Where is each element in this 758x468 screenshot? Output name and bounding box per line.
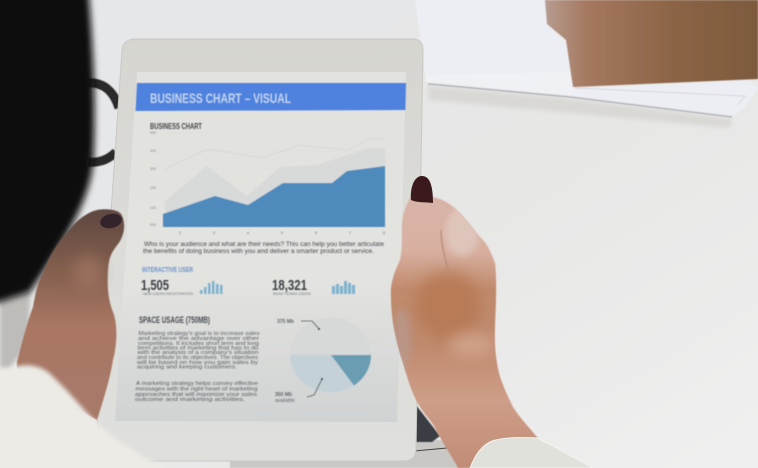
header title: BUSINESS CHART – VISUAL — [150, 90, 291, 106]
pie chart — [290, 318, 371, 393]
marketing paragraph 1: term activities of marketing that has to do — [138, 346, 259, 352]
hair — [0, 0, 94, 315]
x axis labels — [179, 231, 385, 235]
fingernail — [99, 212, 123, 230]
left sleeve — [0, 365, 172, 468]
thumb crease — [441, 230, 450, 274]
mini bars 2 — [332, 281, 355, 294]
screen — [115, 72, 406, 422]
stat: 1,505: NEW USERS REGISTRATION — [143, 292, 193, 296]
intro paragraph: the benefits of doing business with you and deliver a smarter product or service. — [143, 248, 374, 255]
y axis labels: 100 — [150, 206, 156, 210]
y axis labels: 000 — [150, 223, 156, 227]
dark handle behind tablet — [88, 83, 119, 162]
stat: 18,321: READ TERMS USERS — [273, 292, 311, 296]
marketing paragraph 2: approaches that will maximize your sales — [135, 392, 258, 398]
skin shading — [393, 208, 496, 372]
table surface under tablet — [230, 440, 460, 468]
label: 350 Mb available — [275, 378, 323, 404]
marketing paragraph 1: and contribute to its objectives. The objectives — [137, 355, 259, 361]
interactive user heading: INTERACTIVE USER — [142, 265, 193, 274]
dark patch by wrist — [416, 405, 440, 442]
header band — [136, 83, 406, 111]
blue area series — [163, 166, 385, 227]
x axis labels: 7 — [349, 231, 351, 235]
left hand — [17, 209, 124, 420]
label: 350 Mb available: available — [275, 398, 295, 404]
marketing paragraph 1: will be based on how you gain sales by — [137, 360, 259, 366]
x axis labels: 3 — [213, 231, 215, 235]
x axis labels: 5 — [281, 231, 283, 235]
right arm and hand — [391, 176, 548, 468]
marketing paragraph 1: with the analysis of a company's situation — [138, 350, 259, 356]
marketing paragraph 1: acquiring and keeping customers. — [137, 364, 237, 370]
label: 375 Mb: 375 Mb — [277, 319, 294, 325]
dark line on table — [414, 448, 447, 451]
tablet body — [97, 39, 423, 461]
knuckle highlight — [73, 255, 103, 289]
right sleeve — [470, 437, 593, 468]
x axis labels: 8 — [383, 231, 385, 235]
marketing paragraph 1: Marketing strategy's goal is to increase sales — [138, 331, 260, 337]
divider rule — [136, 302, 386, 304]
newspaper at left edge — [0, 290, 30, 372]
area chart — [150, 131, 385, 235]
space usage heading: SPACE USAGE (750MB) — [139, 315, 210, 325]
stack of papers — [415, 0, 758, 117]
x axis labels: 2 — [179, 231, 181, 235]
label: 375 Mb — [277, 319, 320, 330]
marketing paragraph 2: outcome and marketing activities. — [135, 397, 245, 403]
marketing paragraph 1: competitions. It includes short term and long — [138, 341, 259, 347]
stat: 18,321: 18,321 — [272, 277, 307, 294]
y axis labels: 300 — [150, 167, 156, 171]
marketing paragraph 1: and achieve the advantage over other — [138, 336, 259, 342]
fingernail — [411, 176, 433, 203]
y axis labels: 200 — [150, 186, 156, 190]
intro paragraph: Who is your audience and what are their needs? This can help you better articulate — [144, 241, 384, 248]
stat: 1,505 — [141, 277, 193, 296]
y axis labels — [150, 131, 156, 227]
y axis labels: 500 — [150, 131, 156, 135]
y axis labels: 400 — [150, 149, 156, 153]
x axis labels: 6 — [315, 231, 317, 235]
marketing paragraph 1 — [137, 331, 260, 370]
marketing paragraph 2 — [135, 381, 258, 403]
marketing paragraph 2: messages with the right heart of marketing — [136, 386, 258, 392]
marketing paragraph 2: A marketing strategy helps convey effective — [136, 381, 258, 387]
tablet — [97, 39, 423, 461]
label: 350 Mb available: 350 Mb — [275, 392, 292, 398]
intro paragraph — [143, 241, 384, 255]
chart heading: BUSINESS CHART — [150, 121, 203, 131]
x axis labels: 4 — [247, 231, 249, 235]
mini bars 1 — [200, 281, 222, 294]
grey area series — [165, 148, 385, 227]
top line series — [165, 138, 385, 169]
stat: 1,505: 1,505 — [141, 277, 169, 294]
brown envelope — [545, 0, 758, 87]
paper shadow — [428, 86, 732, 128]
